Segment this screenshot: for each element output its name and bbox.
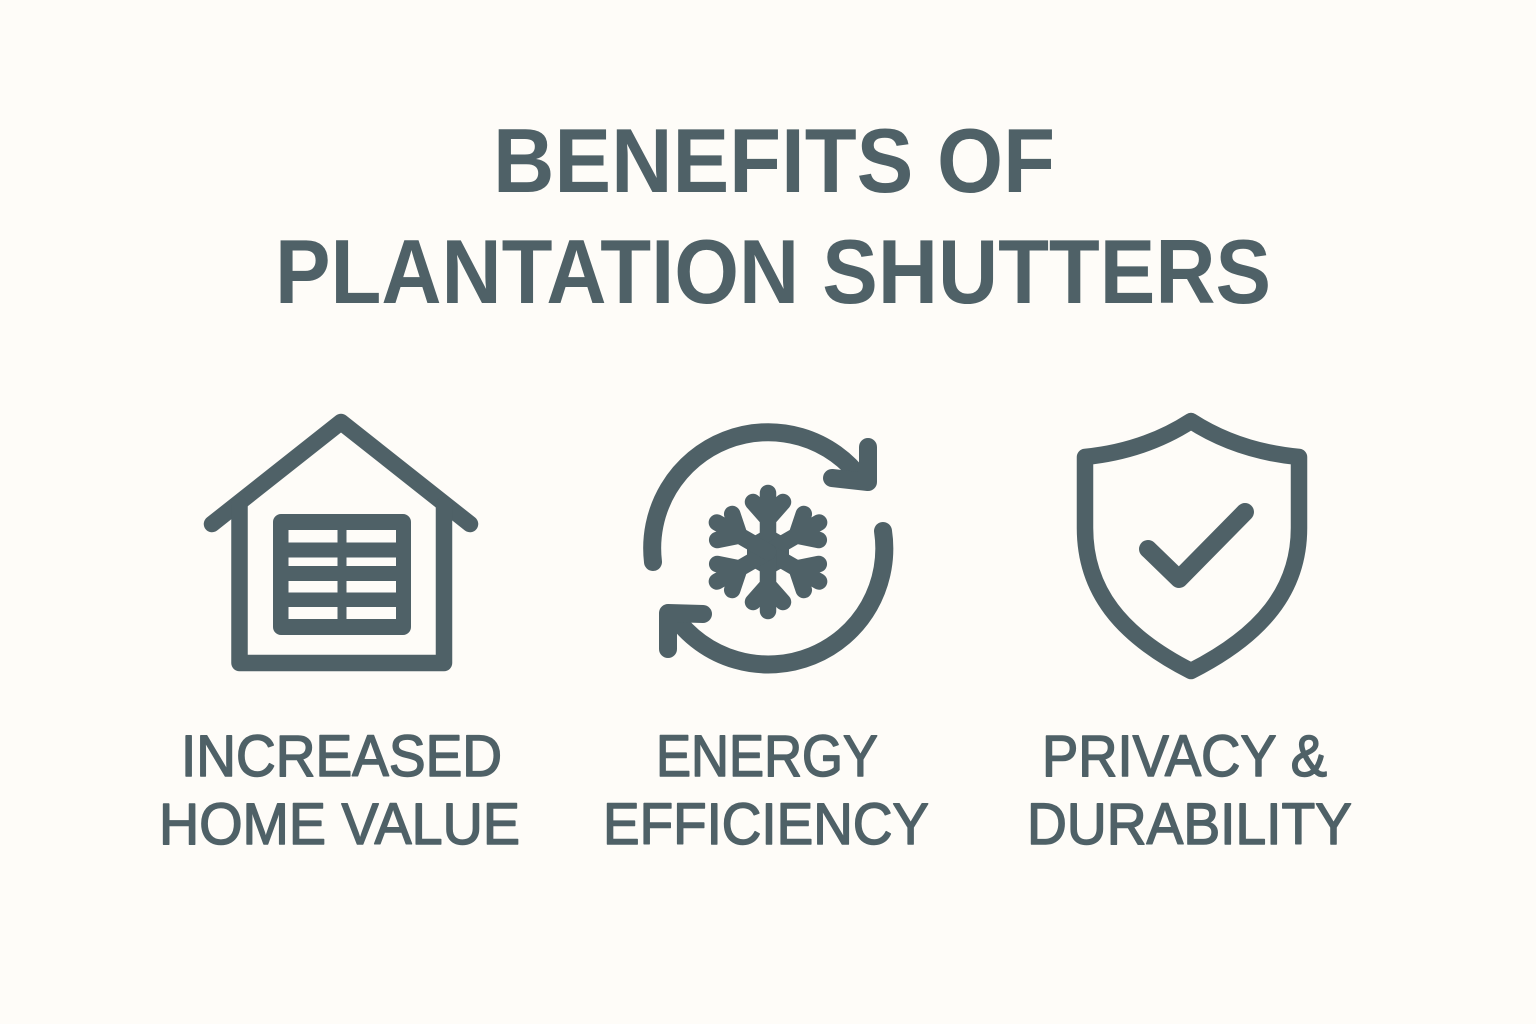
icon: house with shutter window (212, 422, 470, 663)
title: PLANTATION SHUTTERS (275, 222, 1271, 323)
label: increased home value (159, 724, 520, 857)
panel: increased home value (159, 422, 520, 857)
label: increased home value: HOME VALUE (159, 792, 520, 857)
label: privacy and durability: PRIVACY & (1042, 724, 1327, 789)
title (275, 111, 1271, 323)
icon: snowflake (709, 493, 827, 611)
panel: privacy and durability (1027, 421, 1352, 857)
label: energy efficiency: EFFICIENCY (603, 792, 929, 857)
label: privacy and durability: DURABILITY (1027, 792, 1352, 857)
panel: energy efficiency (603, 432, 929, 857)
label: increased home value: INCREASED (181, 724, 502, 789)
icon: shield with check mark (1085, 421, 1299, 671)
icon: snowflake with circular arrows (652, 432, 884, 664)
label: privacy and durability (1027, 724, 1352, 857)
label: energy efficiency: ENERGY (656, 724, 878, 789)
label: energy efficiency (603, 724, 929, 857)
title: BENEFITS OF (493, 111, 1055, 212)
